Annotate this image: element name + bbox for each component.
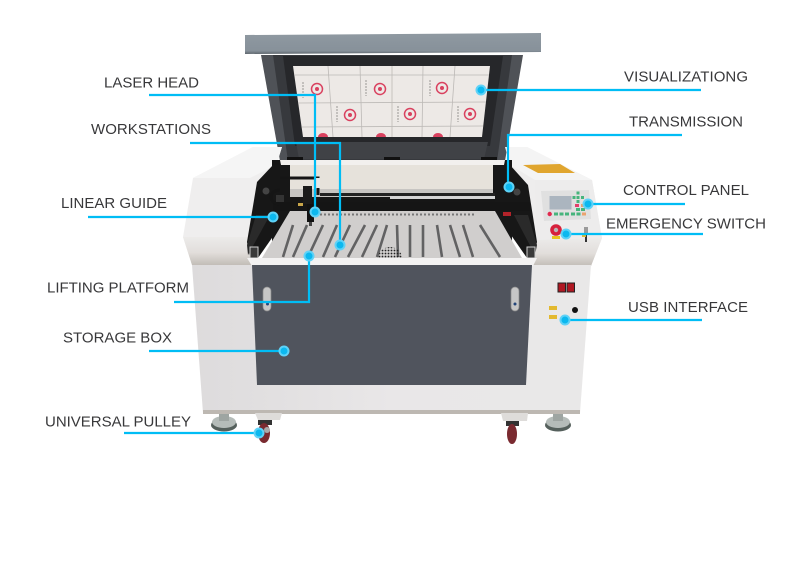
lid top bar <box>245 33 541 54</box>
label: control panel: CONTROL PANEL <box>623 182 749 199</box>
label: linear guide: LINEAR GUIDE <box>61 195 167 212</box>
label: transmission <box>504 114 743 192</box>
platform slats <box>283 225 500 257</box>
warning label <box>523 164 575 173</box>
laser head <box>298 178 320 226</box>
left rail parts <box>271 178 318 204</box>
USB port <box>572 307 578 313</box>
control panel <box>541 190 591 221</box>
fan mesh <box>378 247 402 258</box>
label: USB interface <box>560 299 748 326</box>
left leveling foot <box>211 414 237 432</box>
emergency stop button <box>550 224 562 239</box>
lid window with protective film <box>293 66 490 137</box>
left caster wheel <box>255 413 282 443</box>
left door handle <box>263 287 271 311</box>
label: lifting platform <box>47 250 314 302</box>
key switch <box>582 227 588 242</box>
power switches <box>558 283 574 292</box>
label: emergency switch: EMERGENCY SWITCH <box>606 216 766 233</box>
platform front lip <box>247 258 537 266</box>
warning stickers <box>549 306 557 319</box>
right caster wheel <box>501 413 528 444</box>
right door handle <box>511 287 519 311</box>
label: workstations <box>91 121 346 250</box>
work area <box>247 160 537 266</box>
label: storage box <box>63 330 290 356</box>
label: laser head: LASER HEAD <box>104 75 199 92</box>
label: linear guide <box>61 195 278 222</box>
machine <box>183 33 602 444</box>
label: emergency switch <box>560 216 766 240</box>
right leveling foot <box>545 414 571 432</box>
platform floor <box>262 211 522 258</box>
main body <box>192 265 591 413</box>
storage door <box>252 265 532 385</box>
left housing <box>183 147 282 265</box>
lid <box>245 33 541 161</box>
label: transmission: TRANSMISSION <box>629 114 743 131</box>
label: visualization: VISUALIZATIONG <box>624 69 748 86</box>
label: lifting platform: LIFTING PLATFORM <box>47 280 189 297</box>
label: universal pulley <box>45 414 264 438</box>
label: laser head <box>104 75 320 218</box>
label: universal pulley: UNIVERSAL PULLEY <box>45 414 191 431</box>
label: workstations: WORKSTATIONS <box>91 121 211 138</box>
label: USB interface: USB INTERFACE <box>628 299 748 316</box>
right housing <box>507 147 602 266</box>
label: visualization <box>476 69 748 96</box>
label: control panel <box>582 182 749 210</box>
gantry beam <box>273 202 530 211</box>
label: storage box: STORAGE BOX <box>63 330 172 347</box>
